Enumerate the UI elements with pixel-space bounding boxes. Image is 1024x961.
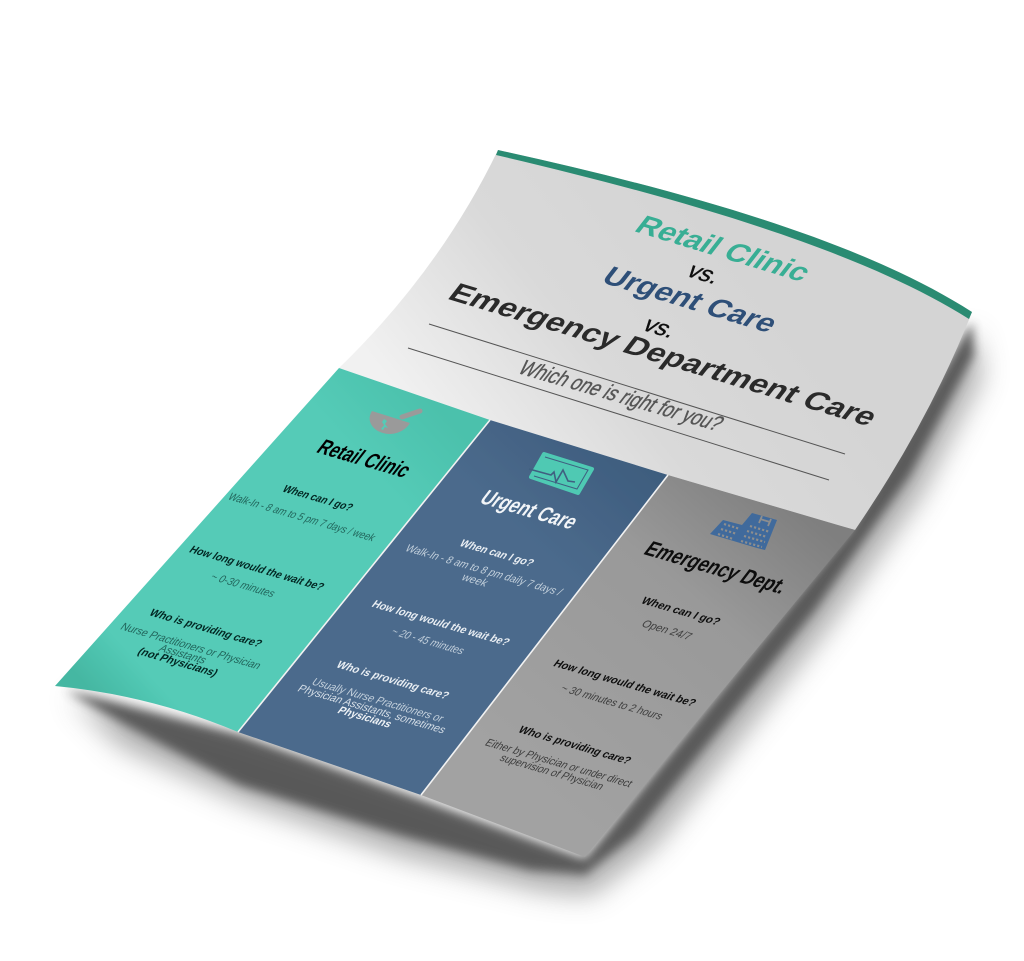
rule below subtitle (408, 348, 829, 480)
title: retail clinic: Retail Clinic (629, 211, 817, 287)
answer line 2: week (458, 571, 491, 589)
answer: ~ 0-30 minutes (208, 570, 278, 600)
column 1: retail clinic text (118, 436, 416, 679)
question: Who is providing care? (147, 606, 265, 650)
answer: ~ 20 - 45 minutes (388, 625, 468, 657)
question: Who is providing care? (334, 658, 452, 702)
question: When can I go? (638, 594, 724, 628)
title: vs 2: vs. (637, 313, 683, 343)
icon: hospital building (710, 513, 777, 550)
column heading: Retail Clinic (312, 436, 416, 482)
question: How long would the wait be? (187, 543, 327, 593)
question: When can I go? (457, 537, 537, 569)
answer: ~ 30 minutes to 2 hours (558, 682, 666, 722)
title: urgent care: Urgent Care (596, 262, 784, 338)
paper shadow (65, 322, 982, 895)
question: How long would the wait be? (551, 657, 699, 709)
answer line 2: Physician Assistants, sometimes (295, 682, 449, 736)
rule above subtitle (429, 324, 845, 454)
title: vs 1: vs. (681, 259, 727, 289)
answer: Open 24/7 (639, 617, 696, 643)
answer line 1: Either by Physician or under direct (482, 736, 636, 790)
column heading: Urgent Care (475, 486, 583, 534)
title: emergency department care: Emergency Department Care (442, 278, 884, 432)
subtitle: Which one is right for you? (513, 356, 729, 436)
icon: mortar and pestle (370, 411, 420, 434)
answer bold: (not Physicians) (135, 645, 221, 679)
answer line 1: Walk-In - 8 am to 8 pm daily 7 days / (402, 542, 566, 598)
icon: heart monitor (529, 454, 592, 493)
column divider (238, 420, 668, 795)
answer line 1: Nurse Practitioners or Physician (118, 620, 264, 672)
top green band (496, 150, 972, 319)
answer: Walk-In - 8 am to 5 pm 7 days / week (225, 490, 379, 544)
panel: emergency dept column (421, 475, 855, 857)
title (442, 211, 884, 432)
flyer sheet (55, 150, 972, 857)
panel: urgent care column (238, 420, 668, 795)
answer line 2: Assistants (156, 642, 210, 666)
column 2: urgent care text (295, 486, 583, 736)
answer line 1: Usually Nurse Practitioners or (309, 676, 447, 724)
question: Who is providing care? (516, 723, 634, 767)
question: When can I go? (280, 483, 356, 513)
panel: retail clinic column (55, 368, 490, 732)
panel: header area (339, 150, 972, 530)
column heading: Emergency Dept. (639, 537, 793, 599)
answer bold: Physicians (335, 704, 395, 730)
question: How long would the wait be? (369, 598, 513, 648)
column 3: emergency dept text (482, 537, 793, 792)
answer line 2: supervision of Physician (497, 752, 607, 792)
